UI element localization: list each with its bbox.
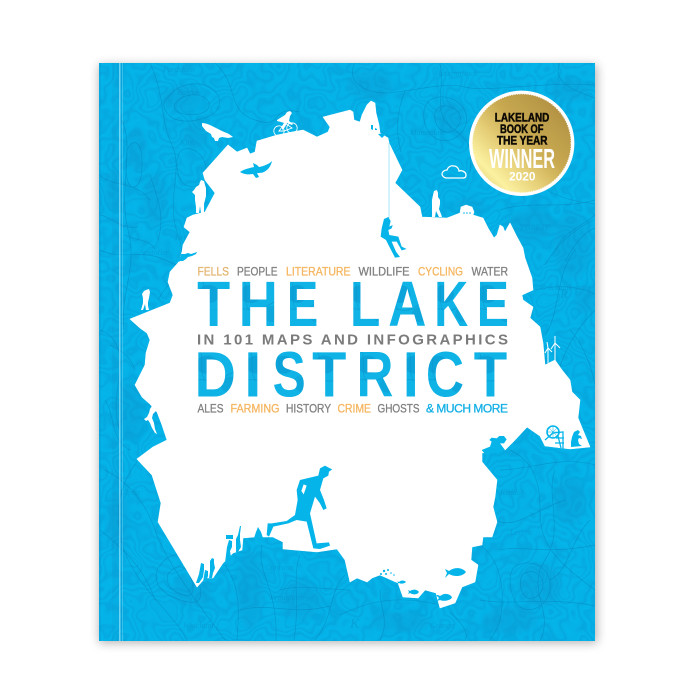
bottom topics line: ALES: [198, 402, 224, 416]
map texture: Matterdale: [409, 128, 446, 137]
badge text: [489, 110, 555, 184]
book cover: [99, 63, 595, 641]
icon: white hiker with bag: [192, 180, 206, 213]
heading: THE LAKE: A: [388, 269, 426, 340]
map texture: Watermillock: [435, 69, 478, 78]
icon: white hiker with pole: [432, 190, 442, 217]
heading: THE LAKE: K: [434, 268, 468, 340]
top topics line: LITERATURE: [286, 264, 350, 278]
top topics line: CYCLING: [418, 264, 463, 278]
icon: squirrel: [482, 436, 507, 454]
heading: DISTRICT: R: [357, 339, 393, 411]
top topics line: WILDLIFE: [358, 264, 410, 278]
icon: white rock climber: [144, 406, 157, 434]
icon: white cyclist: [274, 111, 297, 136]
badge text: BOOK OF: [500, 122, 544, 136]
heading: DISTRICT: T: [312, 338, 346, 411]
map texture: Pardshaw: [162, 65, 196, 74]
map texture: [99, 63, 595, 641]
map texture: R: [559, 286, 568, 301]
heading: THE LAKE: L: [350, 269, 380, 341]
map texture: Broughton: [270, 593, 304, 602]
map texture: Coniston: [265, 563, 294, 572]
map texture: FOREST: [519, 223, 549, 232]
top topics line: PEOPLE: [237, 264, 278, 278]
top topics line: [198, 264, 508, 278]
icon: white walker on left edge: [141, 289, 150, 310]
icon: bubbles: [380, 569, 395, 576]
title block: [194, 264, 509, 416]
heading: THE LAKE: T: [197, 268, 230, 340]
heading: DISTRICT: S: [273, 340, 306, 411]
icon: cloud: [442, 166, 466, 178]
badge text: LAKELAND: [495, 110, 550, 124]
heading: DISTRICT: C: [426, 340, 464, 411]
map texture: Red Pike: [174, 233, 204, 242]
white Lake District map shape: [130, 101, 590, 608]
icon: blue bird: [240, 161, 272, 178]
heading: THE LAKE: [197, 268, 509, 341]
award badge: [469, 91, 574, 196]
icon: fish medium: [436, 594, 452, 601]
icon: wind turbines: [545, 336, 560, 363]
icon: white bird: [202, 123, 233, 141]
icon: small climbers on bottom ridge: [196, 526, 263, 583]
heading: DISTRICT: I: [403, 339, 419, 410]
map texture: Barrow: [177, 88, 202, 97]
icon: crawling figure: [177, 252, 197, 262]
bottom topics line: FARMING: [230, 402, 280, 416]
map texture: Brackenthwaite: [540, 283, 591, 292]
icon: fish large: [445, 568, 466, 578]
heading: DISTRICT: D: [194, 339, 236, 410]
heading: THE LAKE: E: [477, 268, 509, 341]
map texture: Whicham: [183, 621, 213, 630]
bottom topics line: CRIME: [338, 402, 371, 416]
rope: [388, 143, 390, 218]
bottom topics line: GHOSTS: [378, 402, 420, 416]
icon: fell runner: [267, 466, 332, 549]
bottom topics line: HISTORY: [286, 402, 331, 416]
badge text: 2020: [509, 170, 536, 184]
icon: fish tiny: [397, 580, 406, 584]
map texture: Ulpha: [120, 488, 140, 497]
map texture: Kendal: [499, 488, 524, 497]
badge text: THE YEAR: [497, 134, 548, 148]
heading: THE LAKE: E: [287, 268, 318, 340]
bottom topics line: [198, 402, 508, 416]
heading: THE LAKE: H: [239, 268, 278, 340]
icon: pit wheel and winding gear: [545, 426, 564, 449]
map texture: K: [349, 617, 360, 632]
icon: fish small: [408, 590, 419, 594]
map texture: Seatoller: [140, 248, 170, 257]
badge text: WINNER: [489, 143, 555, 174]
map texture: Grange: [430, 621, 455, 630]
heading: DISTRICT: T: [474, 339, 507, 411]
heading: DISTRICT: I: [244, 340, 261, 411]
icon: climber on summit ledge: [371, 125, 387, 138]
map texture: Levens: [509, 528, 532, 537]
icon: abseiling climber: [381, 217, 407, 258]
top topics line: FELLS: [198, 264, 229, 278]
book drop shadow: [99, 65, 597, 643]
top topics line: WATER: [472, 264, 508, 278]
heading: DISTRICT: [194, 338, 507, 411]
spine: [99, 63, 123, 641]
bottom topics line: & MUCH MORE: [426, 402, 508, 416]
subtitle: IN 101 MAPS AND INFOGRAPHICS: [197, 331, 508, 348]
icon: miner figure: [571, 430, 582, 447]
map texture: Kirk: [179, 138, 195, 147]
icon: sheep: [463, 212, 471, 214]
